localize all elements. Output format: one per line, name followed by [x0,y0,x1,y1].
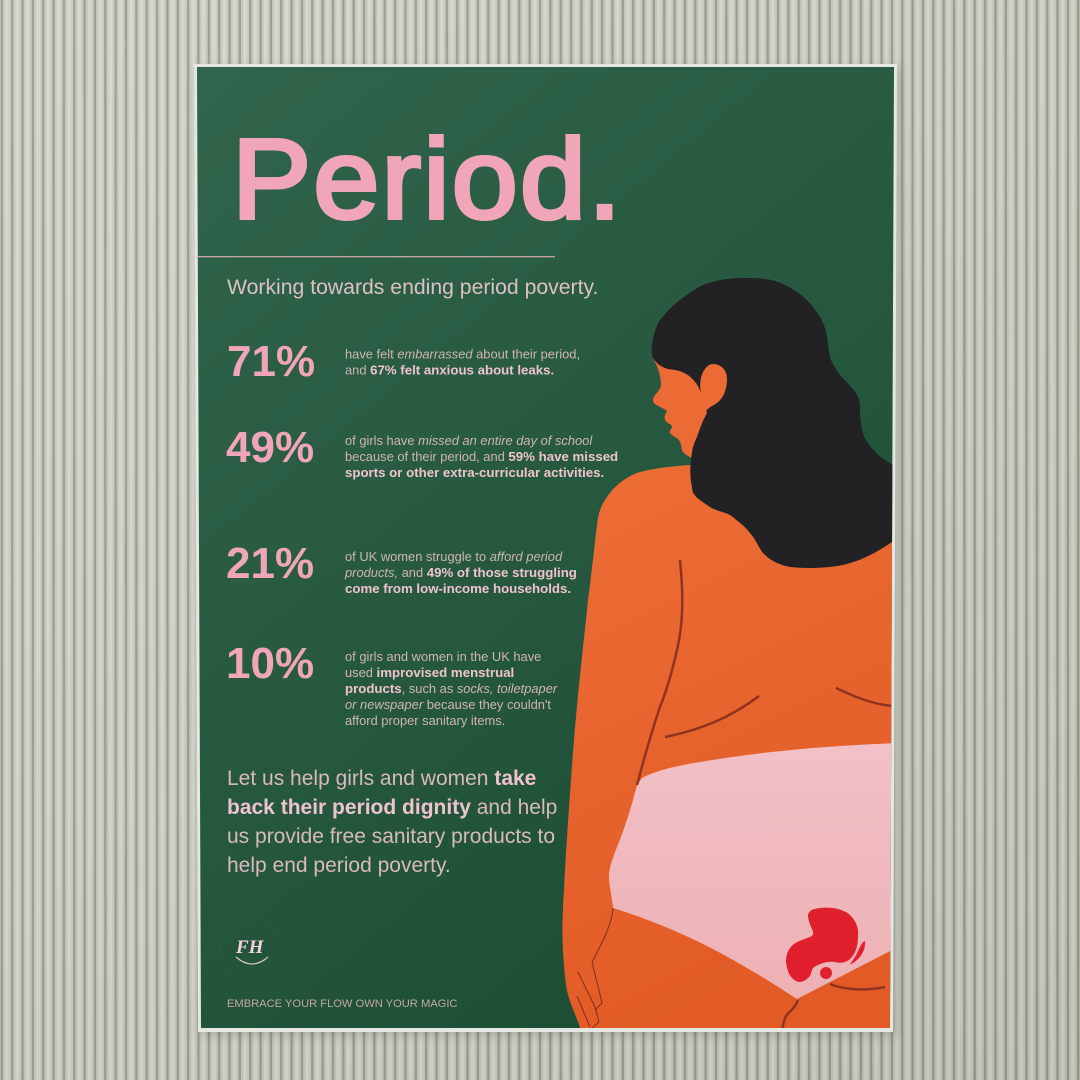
call to action: back their period dignity and help [227,796,557,819]
figure 10%: 10% [226,639,314,688]
description 49%: sports or other extra-curricular activities. [345,465,604,480]
ear [700,364,727,411]
description 49%: of girls have missed an entire day of school [345,433,592,448]
figure 49%: 49% [226,423,314,472]
stat: 49% [226,423,618,480]
face and neck [653,358,707,458]
description 21%: products, and 49% of those struggling [345,565,577,580]
description 21%: come from low-income households. [345,581,571,596]
description 10%: used improvised menstrual [345,665,514,680]
period stain [786,908,865,982]
stat: 21% [226,539,577,596]
description 71%: have felt embarrassed about their period, [345,346,580,362]
description 49%: because of their period, and 59% have missed [345,449,618,464]
logo: FH smile [220,918,284,982]
title: Period. [232,116,623,242]
description 10%: afford proper sanitary items. [345,713,505,728]
back and rib creases [637,560,892,1030]
figure 21%: 21% [226,539,314,588]
figure 71%: 71% [227,337,315,386]
stat: 10% [226,639,558,728]
stat: 71% [227,337,580,386]
call to action: Let us help girls and women take [227,767,536,790]
underwear [609,743,900,999]
call to action: help end period poverty. [227,854,451,877]
poster frame [194,64,897,1032]
call to action: us provide free sanitary products to [227,825,555,848]
poster [194,64,901,1036]
hand outline [577,908,613,1028]
hair [652,278,900,568]
logo: FH smile: FH [235,937,265,958]
tagline: EMBRACE YOUR FLOW OWN YOUR MAGIC [227,998,457,1010]
poster shadow [196,68,901,1036]
body [562,465,900,1030]
description 71%: and 67% felt anxious about leaks. [345,362,554,378]
subtitle: Working towards ending period poverty. [227,276,598,299]
poster green background [197,67,894,1028]
illustration: woman from behind [562,278,900,1030]
description 10%: of girls and women in the UK have [345,649,541,664]
description 21%: of UK women struggle to afford period [345,549,562,564]
title rule [197,256,555,257]
description 10%: or newspaper because they couldn't [345,697,551,712]
description 10%: products, such as socks, toiletpaper [345,681,557,696]
